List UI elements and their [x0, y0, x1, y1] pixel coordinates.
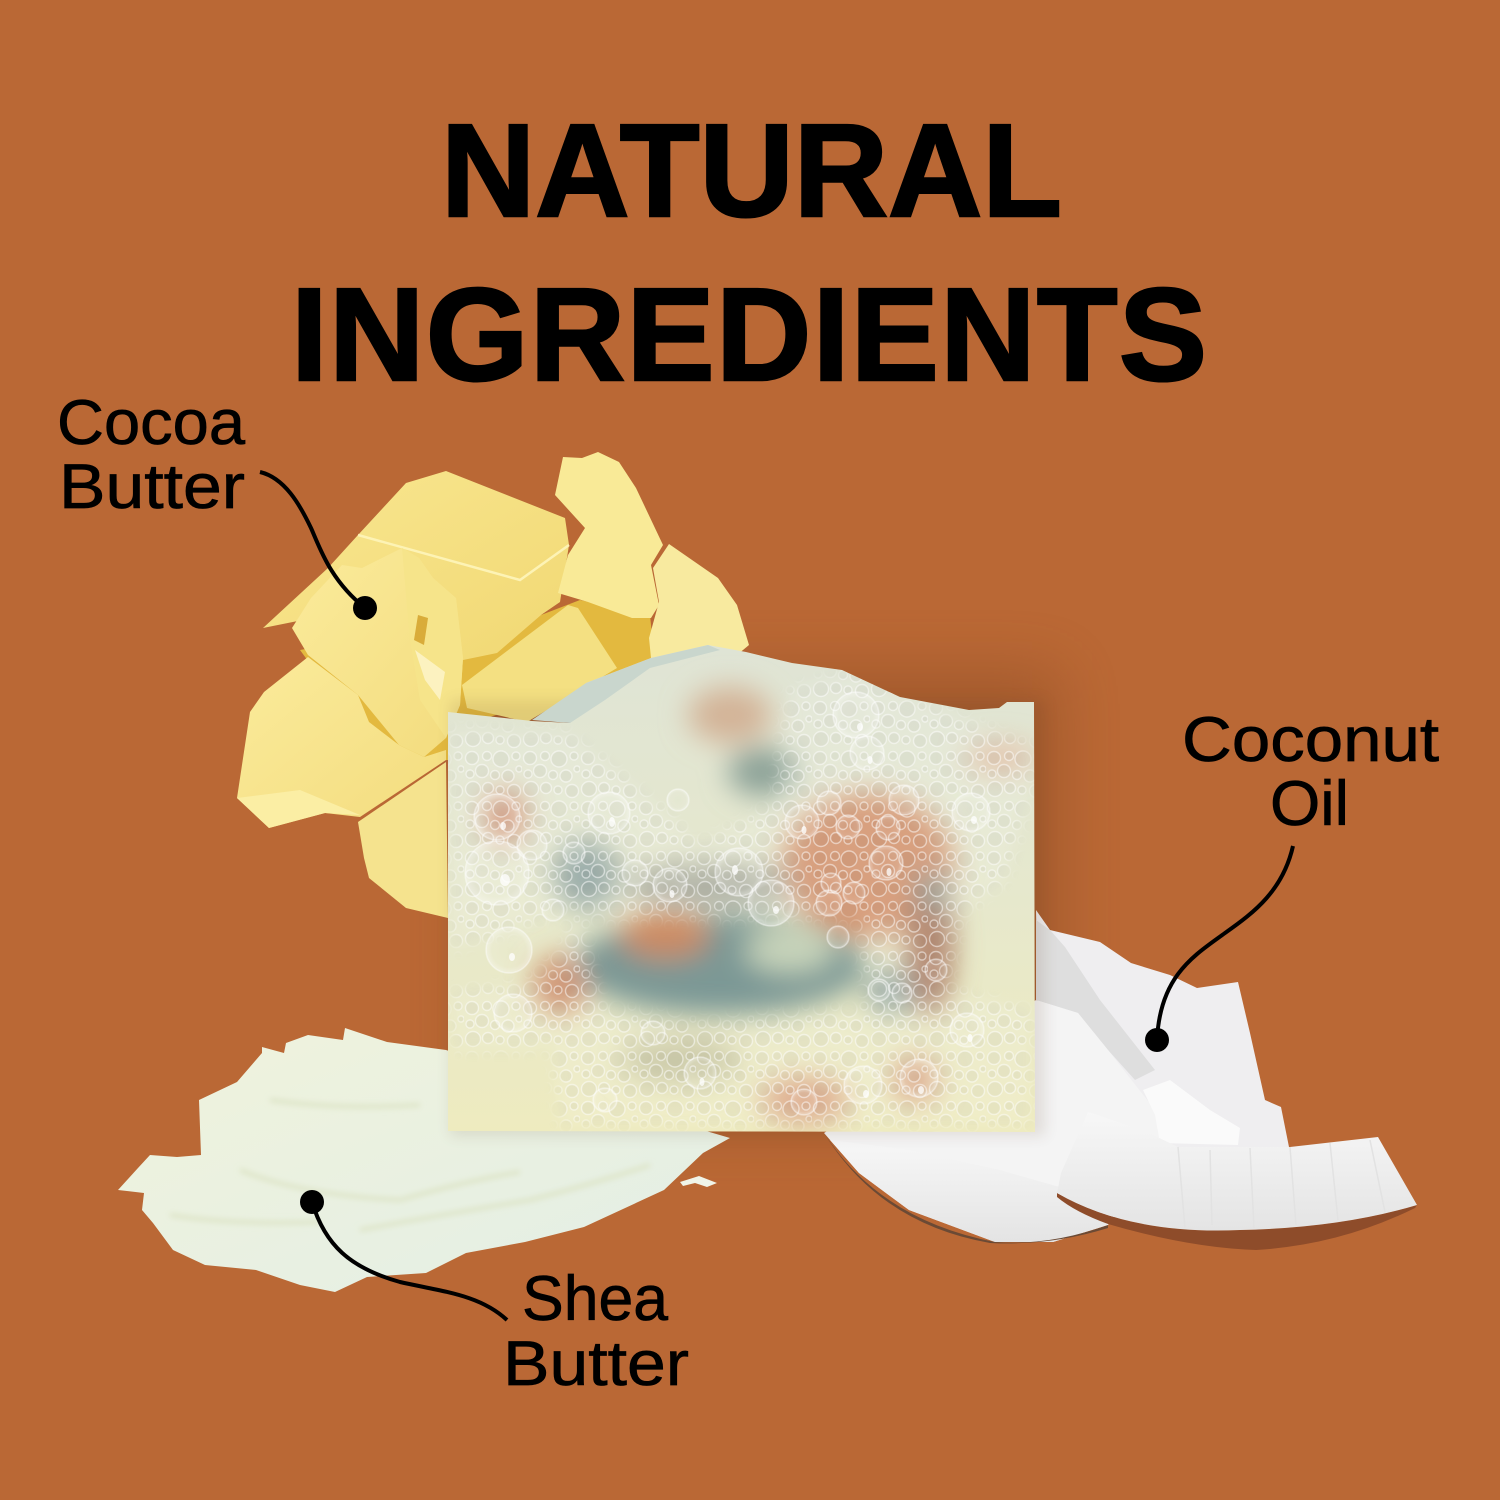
shea texture — [170, 1100, 650, 1230]
label: coconut oil — [1182, 705, 1440, 839]
title: NATURAL — [441, 97, 1062, 244]
callout: cocoa butter leader — [260, 472, 377, 620]
soap bubbles — [465, 692, 990, 1115]
label: cocoa butter: Cocoa — [57, 388, 246, 458]
label: shea butter: Butter — [503, 1329, 689, 1399]
label: coconut oil: Oil — [1270, 769, 1349, 839]
soap marbling — [485, 687, 1034, 1122]
round piece — [824, 1000, 1170, 1242]
fibrous ridge — [1036, 920, 1155, 1080]
title: INGREDIENTS — [291, 261, 1207, 408]
soft soap shadow on ingredients — [450, 700, 1045, 1136]
bubble glints — [500, 723, 977, 1098]
title — [291, 97, 1207, 408]
middle bar chunk — [462, 605, 617, 722]
front chunk — [292, 548, 463, 757]
callout: shea butter leader — [300, 1190, 507, 1320]
grey-blue top ledge — [532, 645, 720, 723]
chipped shard — [1143, 1080, 1240, 1145]
ingredient: coconut pieces — [824, 910, 1417, 1250]
dense foam — [440, 640, 1040, 1140]
front wedge — [1057, 1112, 1417, 1231]
label: cocoa butter — [57, 388, 246, 522]
label: cocoa butter: Butter — [59, 452, 245, 522]
label: shea butter: Shea — [522, 1264, 669, 1334]
lower left chunk — [237, 657, 446, 828]
infographic canvas — [60, 124, 1439, 1386]
lower middle chunk — [358, 762, 448, 918]
label: coconut oil: Coconut — [1182, 705, 1440, 775]
amber shaded interior — [300, 600, 655, 760]
back chunk — [263, 471, 569, 660]
brown shell — [1057, 1193, 1417, 1250]
label: shea butter — [503, 1264, 689, 1399]
back piece — [1036, 910, 1289, 1150]
ingredient: shea butter smear — [118, 1028, 730, 1292]
ingredient: cocoa butter chunks — [237, 452, 749, 918]
top right chunk — [555, 452, 663, 618]
callout: coconut oil leader — [1145, 846, 1293, 1052]
right chunk — [649, 544, 749, 658]
soap bar — [440, 640, 1040, 1140]
soap cast shadow on background — [470, 670, 1060, 1130]
